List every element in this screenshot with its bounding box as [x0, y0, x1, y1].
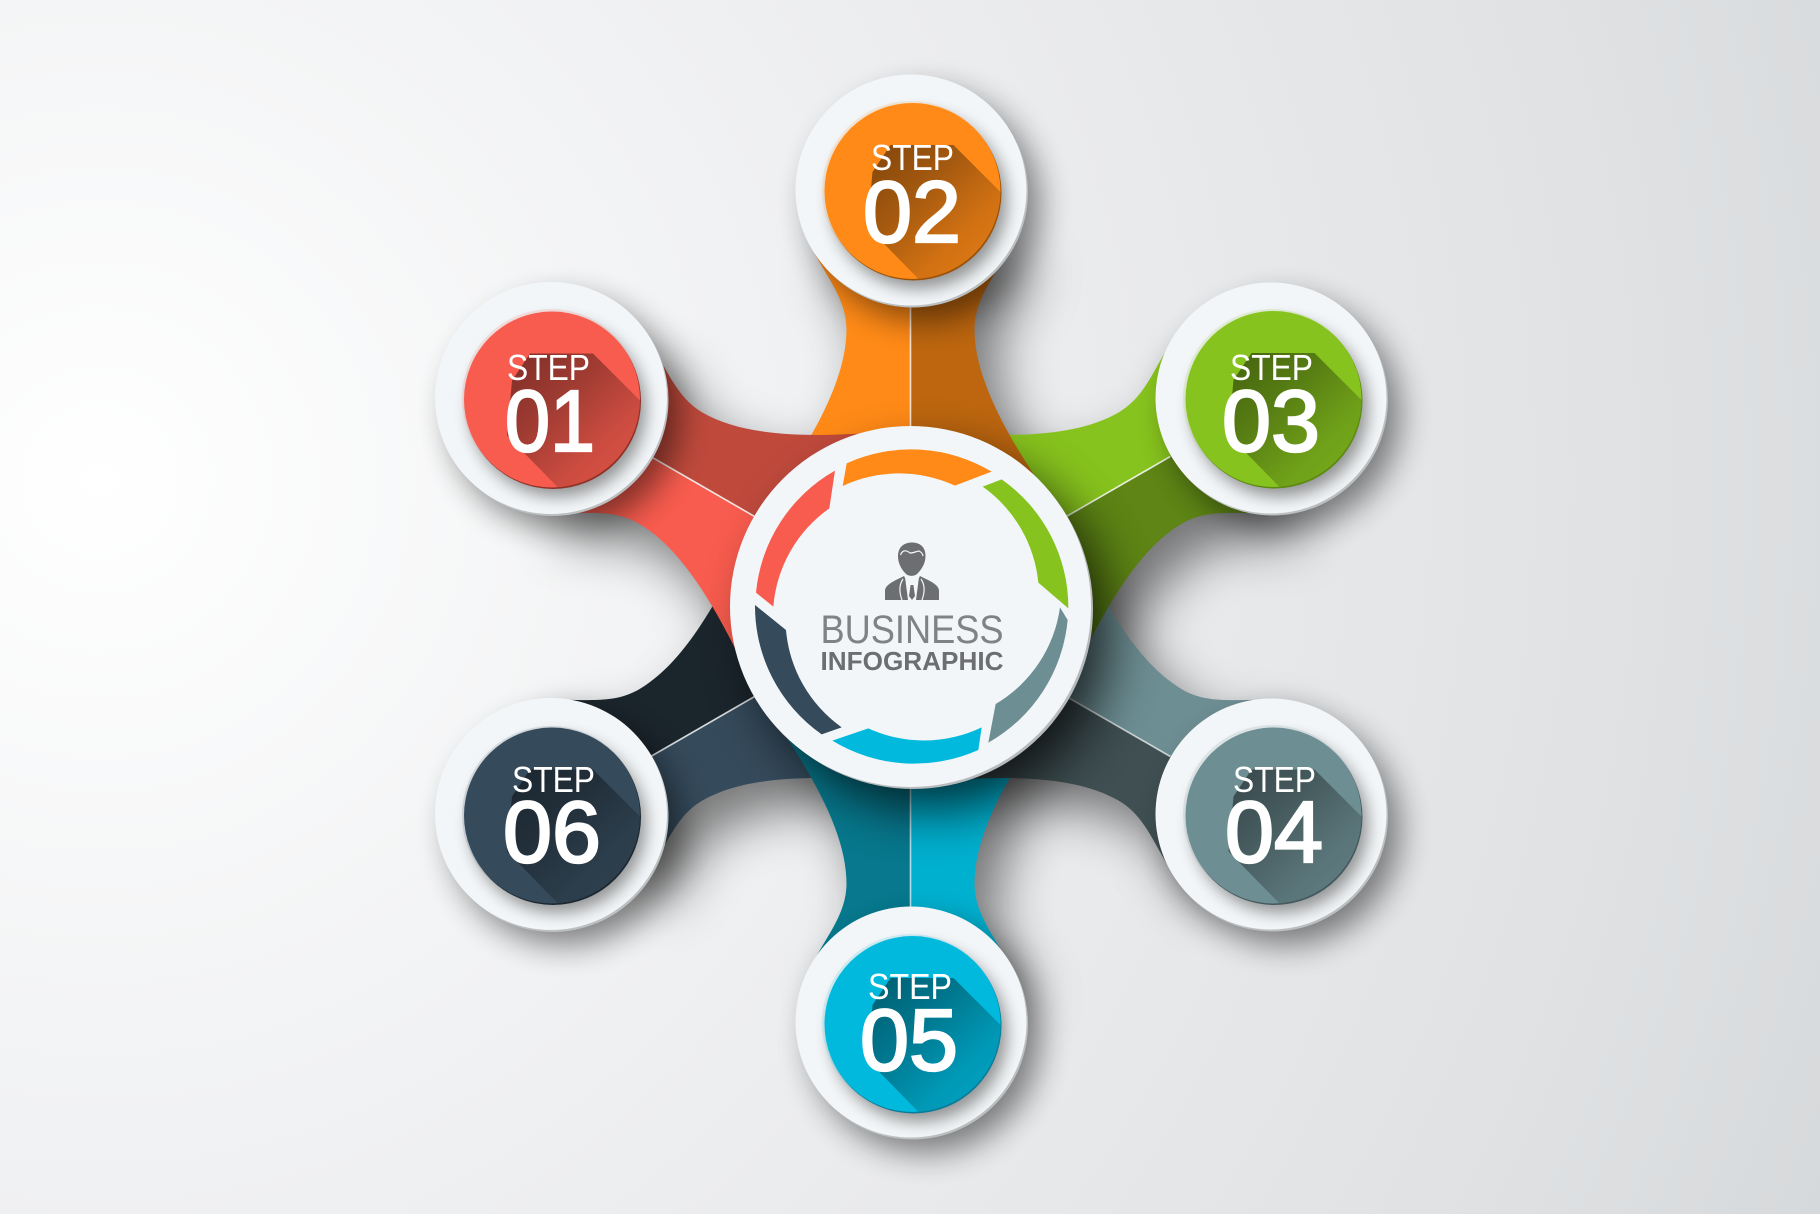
step 01 badge	[435, 282, 668, 516]
number: 01	[505, 373, 595, 470]
centre circle	[730, 426, 1093, 789]
petal: step 03 green	[848, 311, 1296, 716]
arrow segment red	[756, 471, 835, 607]
number: 03	[1222, 373, 1320, 470]
step 06 badge	[435, 698, 668, 932]
label: STEP	[512, 759, 595, 800]
cast shadow of petals on background	[547, 262, 1317, 1006]
title: business: BUSINESS	[820, 608, 1004, 652]
label: STEP	[507, 347, 590, 388]
petal: step 05 blue	[784, 606, 1036, 978]
step 04 badge	[1156, 698, 1388, 932]
petal: step 02 orange	[784, 234, 1036, 606]
step 02 badge	[796, 74, 1028, 308]
label: STEP	[1230, 347, 1313, 388]
number: 02	[863, 164, 961, 261]
icon: businessman	[885, 542, 939, 600]
label: STEP	[1233, 759, 1316, 800]
arrow segment orange	[843, 449, 992, 486]
petal: step 01 red	[525, 311, 974, 716]
arrow segment grey	[988, 607, 1068, 743]
label: STEP	[871, 137, 954, 178]
label: STEP	[868, 966, 952, 1007]
drop shadows of the circles	[450, 91, 1400, 1153]
step 03 badge	[1156, 282, 1388, 516]
number: 06	[503, 784, 601, 881]
number: 04	[1225, 784, 1323, 881]
petal: step 04 grey	[848, 497, 1296, 902]
circular arrow ring	[755, 449, 1068, 764]
title: infographic: INFOGRAPHIC	[820, 646, 1004, 676]
arrow segment navy	[755, 605, 842, 734]
number: 05	[860, 992, 958, 1089]
arrow segment blue	[832, 727, 982, 764]
arrow segment green	[983, 479, 1068, 608]
step 05 badge	[796, 906, 1028, 1140]
petal: step 06 navy	[525, 497, 974, 902]
